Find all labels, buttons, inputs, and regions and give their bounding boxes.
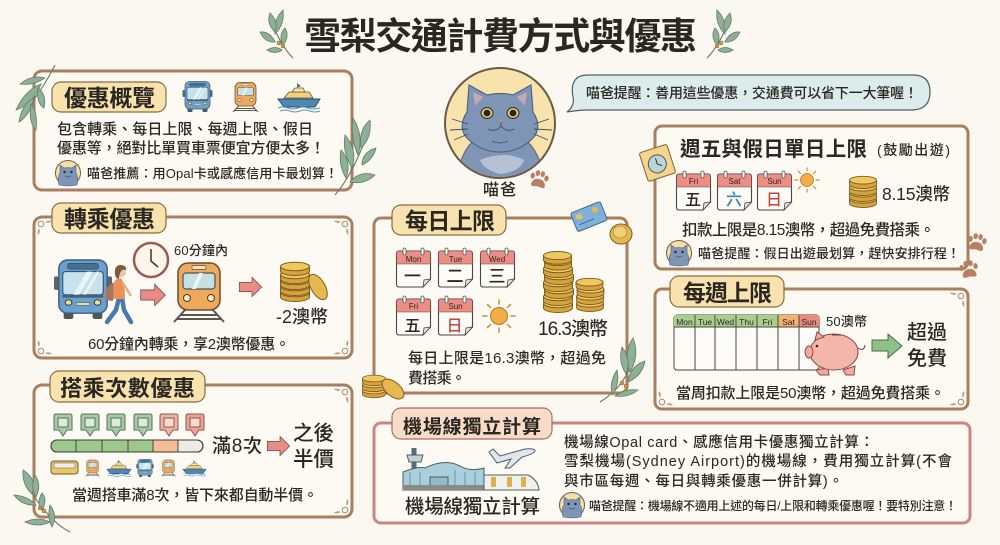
label: over is free: 免費 [907,347,947,370]
label: over is free: 超過 [907,321,947,344]
label: then half price: 半價 [293,448,334,471]
icon: coin stacks [543,252,604,312]
label: 50 dollars: 50澳幣 [826,314,867,329]
panel: weekly cap [655,276,968,409]
heading: weekly cap: 每週上限 [683,280,772,306]
week table [674,315,819,370]
week table: Sat [782,317,796,327]
heading: overview: 優惠概覽 [64,85,155,111]
panel: airport line [374,408,970,523]
label: 8.15 dollars: 8.15澳幣 [882,184,950,204]
icon: branch top left [16,65,55,130]
week table: Tue [698,317,712,327]
calendars: Wed [489,255,505,264]
heading: transfer: 轉乘優惠 [64,206,155,232]
icon: sun [483,300,515,332]
caption: 扣款上限是8.15澳幣，超過免費搭乘。 [682,220,935,239]
icon: clock [134,243,168,277]
week table: Thu [739,317,754,327]
calendars: 五 [404,318,421,335]
caption: 60分鐘內轉乘，享2澳幣優惠。 [88,335,290,353]
icon: coins [362,375,407,403]
heading: daily cap: 每日上限 [405,208,495,234]
label: minus 2 dollars: -2澳幣 [276,307,328,327]
icon: airport and train [403,448,539,490]
label: then half price [293,422,334,471]
label: within 60 min: 60分鐘內 [174,243,228,258]
heading: overview [52,82,166,112]
heading: airport line: 機場線獨立計算 [403,415,541,438]
label: then half price: 之後 [293,422,334,445]
calendars: Tue [449,255,463,264]
speech bubble [567,75,930,112]
icon: coin [610,224,632,244]
caption: 當週搭車滿8次，皆下來都自動半價。 [72,487,318,504]
panel: overview [34,71,352,190]
icon: calendar clock [639,144,676,182]
icon: cat avatar [560,492,584,518]
calendars: Sun [448,302,463,311]
label: over is free [907,321,947,370]
progress bar [51,440,203,452]
tip: 喵爸提醒：假日出遊最划算，趕快安排行程！ [698,246,960,261]
week table: Sun [801,317,817,327]
heading: weekly cap [670,276,784,307]
calendars: Fri [689,177,698,186]
calendars: 一 [404,267,421,286]
icon: paw [528,169,550,189]
panel: ride count [34,371,352,517]
title [260,10,740,58]
text block [57,120,325,157]
text block: 與市區每週、每日與轉乘優惠一併計算)。 [564,472,843,490]
heading: transfer [52,203,166,233]
calendars: Mon [406,255,421,264]
text block [564,433,952,490]
icon: branch bottom left [14,470,70,532]
calendars: 六 [726,191,742,209]
icon: branch [600,338,645,402]
calendars: Sat [728,177,741,186]
calendars: 日 [766,192,782,209]
heading text: 雪梨交通計費方式與優惠 [304,16,697,57]
heading: daily cap [392,205,506,235]
heading: weekend cap: 週五與假日單日上限 [680,138,867,161]
text block: 費搭乘。 [408,370,466,387]
icon: arrow [872,334,902,358]
transport icons row [51,459,206,477]
text block: 包含轉乘、每日上限、每週上限、假日 [57,120,313,138]
calendars [396,248,514,335]
label: 16.3 dollars: 16.3澳幣 [538,318,608,340]
icon: bus [182,82,212,112]
icon: coins [280,262,331,303]
calendars: 日 [446,318,463,335]
text block: 雪梨機場(Sydney Airport)的機場線，費用獨立計算(不會 [564,452,952,470]
text block: 機場線Opal card、感應信用卡優惠獨立計算： [564,433,874,451]
label: airport line: 機場線獨立計算 [405,496,540,518]
caption: 當周扣款上限是50澳幣，超過免費搭乘。 [676,384,945,402]
icon: sun [795,168,819,192]
icon: piggy bank [805,332,865,375]
week table: Wed [717,317,734,327]
label: 8 rides: 滿8次 [212,435,262,457]
label: name: 喵爸 [483,181,516,199]
text block: 每日上限是16.3澳幣，超過免 [408,349,606,367]
panel: weekend cap [639,126,968,269]
calendars: 五 [685,192,701,209]
icon: arrow [267,436,290,456]
panel: transfer [34,203,352,358]
panel: daily cap [374,205,627,393]
icon: branch right [335,118,376,195]
icon: credit card [570,201,608,232]
calendars: Sun [767,177,782,186]
calendars: 二 [446,267,464,286]
heading: ride count: 搭乘次數優惠 [60,376,195,401]
icon: arrow [239,277,262,297]
heading: airport line [392,408,552,439]
calendars: Fri [409,302,418,311]
icon: train [174,263,224,322]
week table: Fri [763,317,773,327]
icon: bus [54,260,112,319]
icon: right branch [707,10,740,58]
recommendation: 喵爸推薦：用Opal卡或感應信用卡最划算！ [87,166,338,181]
icon: cat avatar [666,240,692,266]
icon: arrow [141,284,165,306]
icon: left branch [260,10,293,58]
subheading: (鼓勵出遊) [877,142,950,158]
icon: walking woman [105,265,131,322]
calendars: 三 [488,267,506,286]
icon: coins [850,176,876,208]
calendars [676,171,792,210]
icon: ferry [278,83,320,112]
icon: cat portrait [445,68,555,180]
icon: cat avatar [56,160,80,186]
speech bubble: 喵爸提醒：善用這些優惠，交通費可以省下一大筆喔！ [586,85,918,101]
icon: paws [959,232,988,278]
text block [408,349,606,387]
text block: 優惠等，絕對比單買車票便宜方便太多！ [57,139,325,157]
tip: 喵爸提醒：機場線不適用上述的每日/上限和轉乘優惠喔！要特別注意！ [589,498,957,513]
icon: train [233,82,258,112]
cat mascot [445,68,555,199]
week table: Mon [676,317,693,327]
ride markers [54,414,204,436]
